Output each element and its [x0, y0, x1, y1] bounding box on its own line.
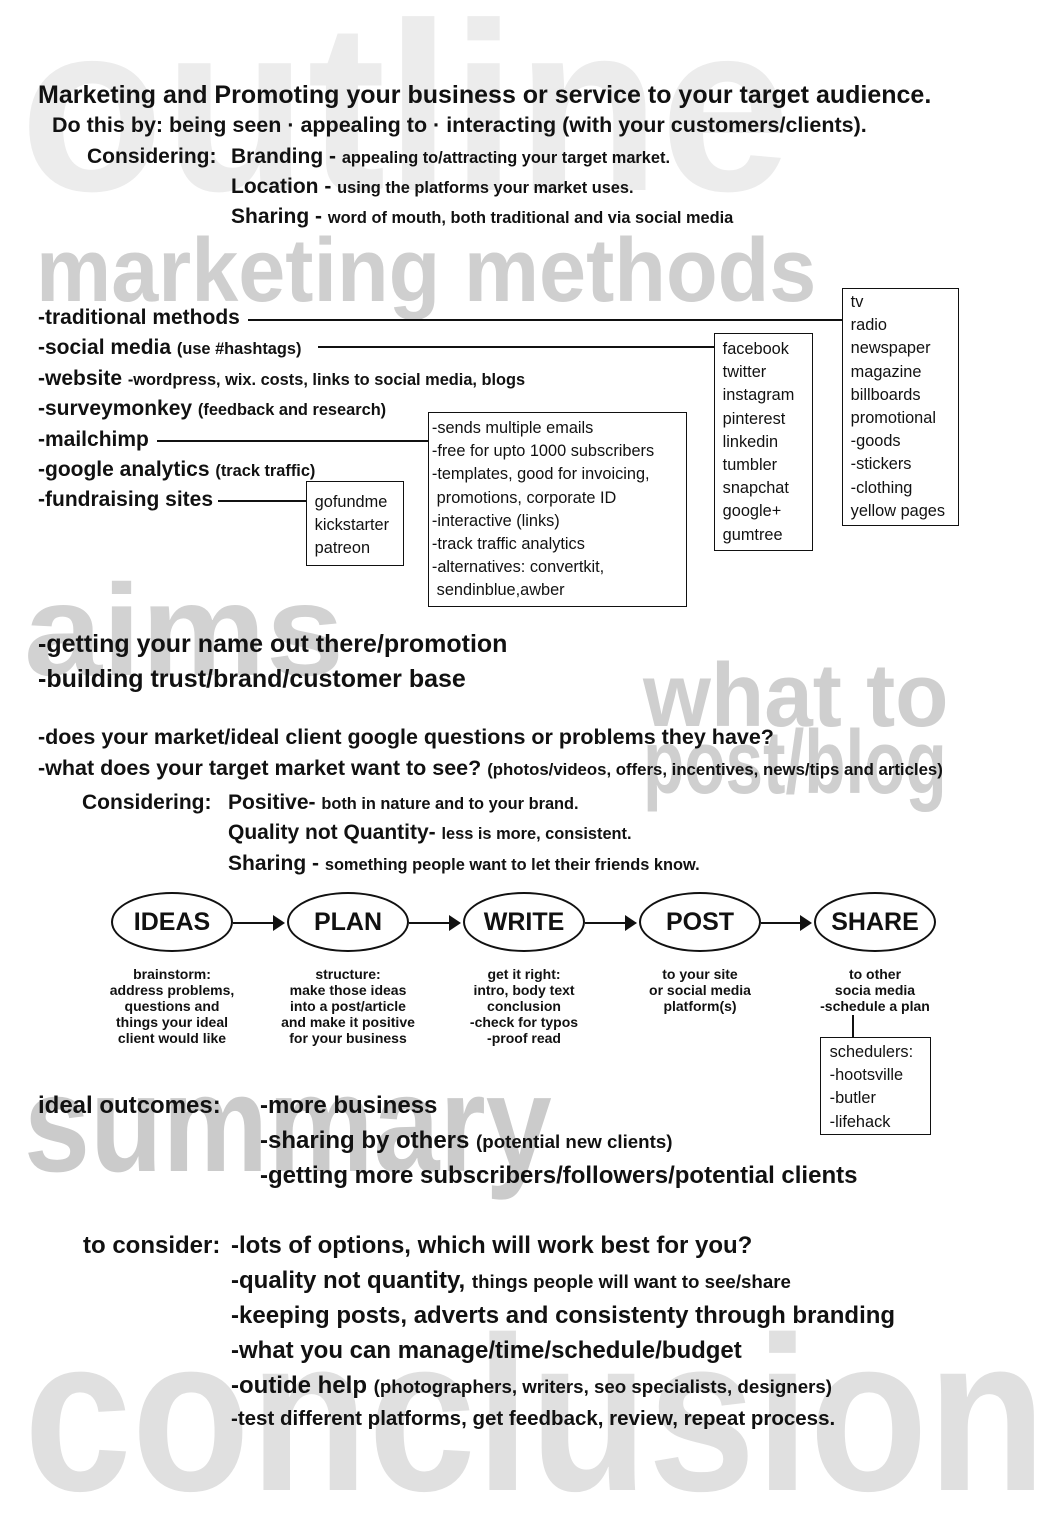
positive: Positive- both in nature and to your brand. [228, 791, 579, 814]
box: social media: tumbler [723, 455, 777, 474]
consider 2: -quality not quantity, things people will want to see/share [231, 1267, 791, 1294]
box: traditional methods: -stickers [851, 454, 911, 473]
consider 5: -outide help (photographers, writers, seo specialists, designers) [231, 1372, 832, 1399]
connector lines [248, 319, 842, 321]
arrow [233, 922, 283, 924]
outline: title: Marketing and Promoting your business or service to your target audience. [38, 81, 931, 109]
box: schedulers: -hootsville [830, 1065, 903, 1084]
question 2: -what does your target market want to see? (photos/videos, offers, incentives, news/tips and articles) [38, 756, 943, 780]
outcome 2: -sharing by others (potential new clients) [260, 1127, 672, 1154]
box: fundraising: kickstarter [315, 515, 389, 534]
step: write [463, 892, 585, 952]
box: social media: gumtree [723, 525, 783, 544]
box: schedulers: -lifehack [830, 1112, 890, 1131]
ideal outcomes [38, 1092, 857, 1189]
desc share: -schedule a plan [820, 998, 930, 1014]
background word: conclusion: conclusion [24, 1291, 1046, 1537]
desc plan [281, 966, 415, 1046]
box: social media: google+ [723, 501, 781, 520]
considering label: Considering: [87, 145, 216, 168]
desc ideas: brainstorm: [133, 966, 211, 982]
box: social media: facebook [723, 339, 789, 358]
desc share: to other [849, 966, 901, 982]
desc write [470, 966, 578, 1046]
desc write: get it right: [487, 966, 561, 982]
step: ideas: IDEAS [134, 908, 210, 936]
box: mailchimp: sendinblue,awber [437, 580, 565, 599]
arrow [409, 922, 459, 924]
box: mailchimp: promotions, corporate ID [437, 488, 616, 507]
box: schedulers: schedulers: [830, 1042, 913, 1061]
process flow [110, 892, 936, 1046]
outcome 3: -getting more subscribers/followers/potential clients [260, 1162, 857, 1189]
quality: Quality not Quantity- less is more, consistent. [228, 821, 632, 844]
desc post: to your site [662, 966, 738, 982]
desc ideas [110, 966, 234, 1046]
box: social media: pinterest [723, 409, 785, 428]
background word: post/blog: post/blog [643, 713, 947, 813]
desc write: conclusion [487, 998, 561, 1014]
mailchimp: -mailchimp [38, 428, 149, 451]
step: post [639, 892, 761, 952]
step: plan: PLAN [314, 908, 382, 936]
desc write: intro, body text [473, 982, 575, 998]
desc ideas: questions and [125, 998, 219, 1014]
outcome 1: -more business [260, 1092, 437, 1119]
traditional: -traditional methods [38, 306, 240, 329]
box: traditional methods: radio [851, 315, 887, 334]
what to post considering [82, 791, 700, 875]
desc ideas: things your ideal [116, 1014, 228, 1030]
box: social media: linkedin [723, 432, 778, 451]
desc post [649, 966, 751, 1014]
box: schedulers [820, 1037, 931, 1135]
box: social media: snapchat [723, 478, 789, 497]
desc post: or social media [649, 982, 751, 998]
consider 6: -test different platforms, get feedback, review, repeat process. [231, 1407, 835, 1430]
desc ideas: address problems, [110, 982, 234, 998]
box: mailchimp: -interactive (links) [432, 511, 560, 530]
background word: summary: summary [24, 1047, 552, 1201]
arrow [585, 922, 635, 924]
background word: aims: aims [24, 557, 344, 703]
to consider [83, 1232, 895, 1430]
google analytics: -google analytics (track traffic) [38, 458, 315, 481]
box: mailchimp [428, 412, 687, 607]
consider 4: -what you can manage/time/schedule/budget [231, 1337, 742, 1364]
box: mailchimp: -templates, good for invoicing, [432, 464, 650, 483]
desc ideas: client would like [118, 1030, 226, 1046]
box: mailchimp: -alternatives: convertkit, [432, 557, 604, 576]
branding: Branding - appealing to/attracting your target market. [231, 145, 670, 168]
box: traditional methods: -goods [851, 431, 901, 450]
box: traditional methods: billboards [851, 385, 921, 404]
desc write: -proof read [487, 1030, 561, 1046]
box: social media [714, 333, 813, 551]
box: social media: instagram [723, 385, 794, 404]
box: fundraising: gofundme [315, 492, 387, 511]
desc plan: and make it positive [281, 1014, 415, 1030]
aim 2: -building trust/brand/customer base [38, 665, 466, 693]
outline: subtitle: Do this by: being seen · appealing to · interacting (with your customers/clients). [52, 113, 867, 137]
consider 1: -lots of options, which will work best for you? [231, 1232, 752, 1259]
step: write: WRITE [484, 908, 564, 936]
surveymonkey: -surveymonkey (feedback and research) [38, 397, 386, 420]
box: traditional methods: yellow pages [851, 501, 945, 520]
label: ideal outcomes: [38, 1092, 221, 1119]
scheduler connector [852, 1015, 854, 1037]
box: fundraising: patreon [315, 538, 370, 557]
step: ideas [111, 892, 233, 952]
consider 3: -keeping posts, adverts and consistenty through branding [231, 1302, 895, 1329]
what to post questions [38, 725, 943, 780]
fundraising: -fundraising sites [38, 488, 213, 511]
marketing methods list [38, 306, 525, 511]
box: traditional methods: newspaper [851, 338, 931, 357]
desc plan: into a post/article [290, 998, 406, 1014]
box: traditional methods: promotional [851, 408, 936, 427]
box: mailchimp: -sends multiple emails [432, 418, 593, 437]
step: share: SHARE [831, 908, 919, 936]
sharing: Sharing - word of mouth, both traditional and via social media [231, 205, 733, 228]
box: traditional methods [842, 288, 959, 526]
website: -website -wordpress, wix. costs, links to social media, blogs [38, 367, 525, 390]
box: fundraising [306, 481, 404, 566]
box: mailchimp: -free for upto 1000 subscribers [432, 441, 654, 460]
outline: considering list [87, 145, 734, 228]
location: Location - using the platforms your market uses. [231, 175, 634, 198]
box: traditional methods: tv [851, 292, 863, 311]
desc plan: structure: [315, 966, 381, 982]
desc post: platform(s) [663, 998, 737, 1014]
box: traditional methods: magazine [851, 362, 921, 381]
background word: what to: what to [643, 646, 949, 746]
desc plan: for your business [289, 1030, 407, 1046]
desc plan: make those ideas [290, 982, 406, 998]
aim 1: -getting your name out there/promotion [38, 630, 507, 658]
aims list [38, 630, 507, 693]
question 1: -does your market/ideal client google questions or problems they have? [38, 725, 774, 749]
background word: marketing methods: marketing methods [36, 221, 816, 321]
desc share [820, 966, 930, 1014]
label: to consider: [83, 1232, 220, 1259]
box: mailchimp: -track traffic analytics [432, 534, 585, 553]
step: plan [287, 892, 409, 952]
box: social media: twitter [723, 362, 766, 381]
step: share [814, 892, 936, 952]
social media: -social media (use #hashtags) [38, 336, 301, 359]
box: schedulers: -butler [830, 1088, 876, 1107]
sharing: Sharing - something people want to let their friends know. [228, 852, 700, 875]
step: post: POST [666, 908, 734, 936]
desc write: -check for typos [470, 1014, 578, 1030]
considering label: Considering: [82, 791, 212, 814]
box: traditional methods: -clothing [851, 478, 912, 497]
desc share: socia media [835, 982, 915, 998]
arrow [761, 922, 810, 924]
